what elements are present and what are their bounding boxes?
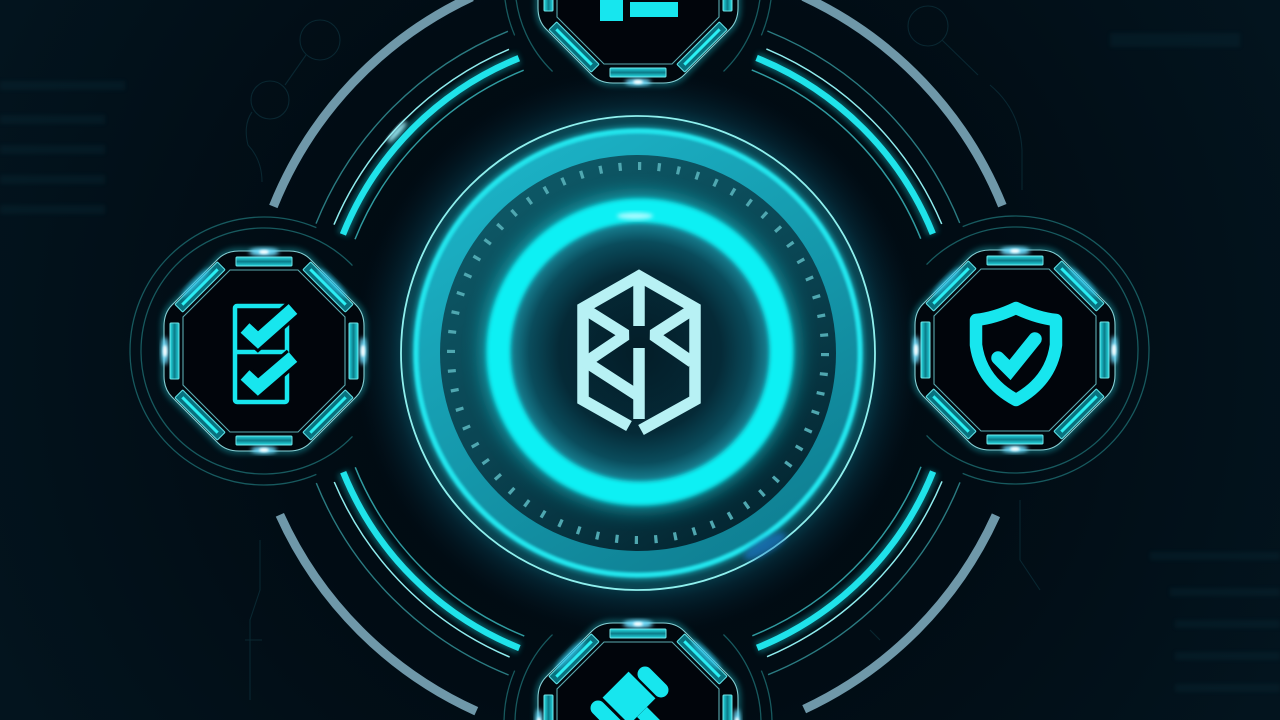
inner ring glow — [498, 210, 782, 494]
core disc — [509, 221, 771, 483]
cyan arc glow — [224, 0, 1052, 720]
left node octagon — [162, 248, 366, 454]
top node octagon — [536, 0, 740, 86]
bright ring glow — [416, 131, 860, 575]
icon: checklist — [235, 306, 293, 402]
bottom node arcs — [462, 547, 814, 720]
cyan arcs — [224, 0, 1052, 720]
central logo — [583, 276, 695, 430]
thin bright arcs — [205, 0, 1071, 720]
icon: document top — [600, 0, 678, 21]
right node octagon — [912, 247, 1118, 452]
arc sparkle — [385, 120, 409, 144]
faint data bars right — [1110, 33, 1280, 692]
central dial — [401, 116, 875, 590]
tick marks — [451, 166, 825, 540]
ring highlight — [617, 212, 653, 220]
dark dial face — [440, 155, 836, 551]
inner bright ring — [498, 210, 782, 494]
central halo — [353, 68, 923, 638]
teal dial band — [417, 132, 859, 574]
icon: shield with check — [976, 308, 1056, 400]
right node arcs — [839, 174, 1191, 526]
blue glint on dial — [741, 528, 789, 564]
top node arcs — [462, 0, 814, 159]
outer thin ring — [401, 116, 875, 590]
icon: gavel — [598, 674, 665, 720]
bottom node octagon — [536, 620, 740, 720]
faint circuit traces — [245, 6, 1040, 700]
frame lines outer — [186, 0, 1090, 720]
frame lines inner — [241, 0, 1035, 720]
faint data bars left — [0, 81, 125, 214]
bright ring — [416, 131, 860, 575]
left node arcs — [88, 175, 440, 527]
